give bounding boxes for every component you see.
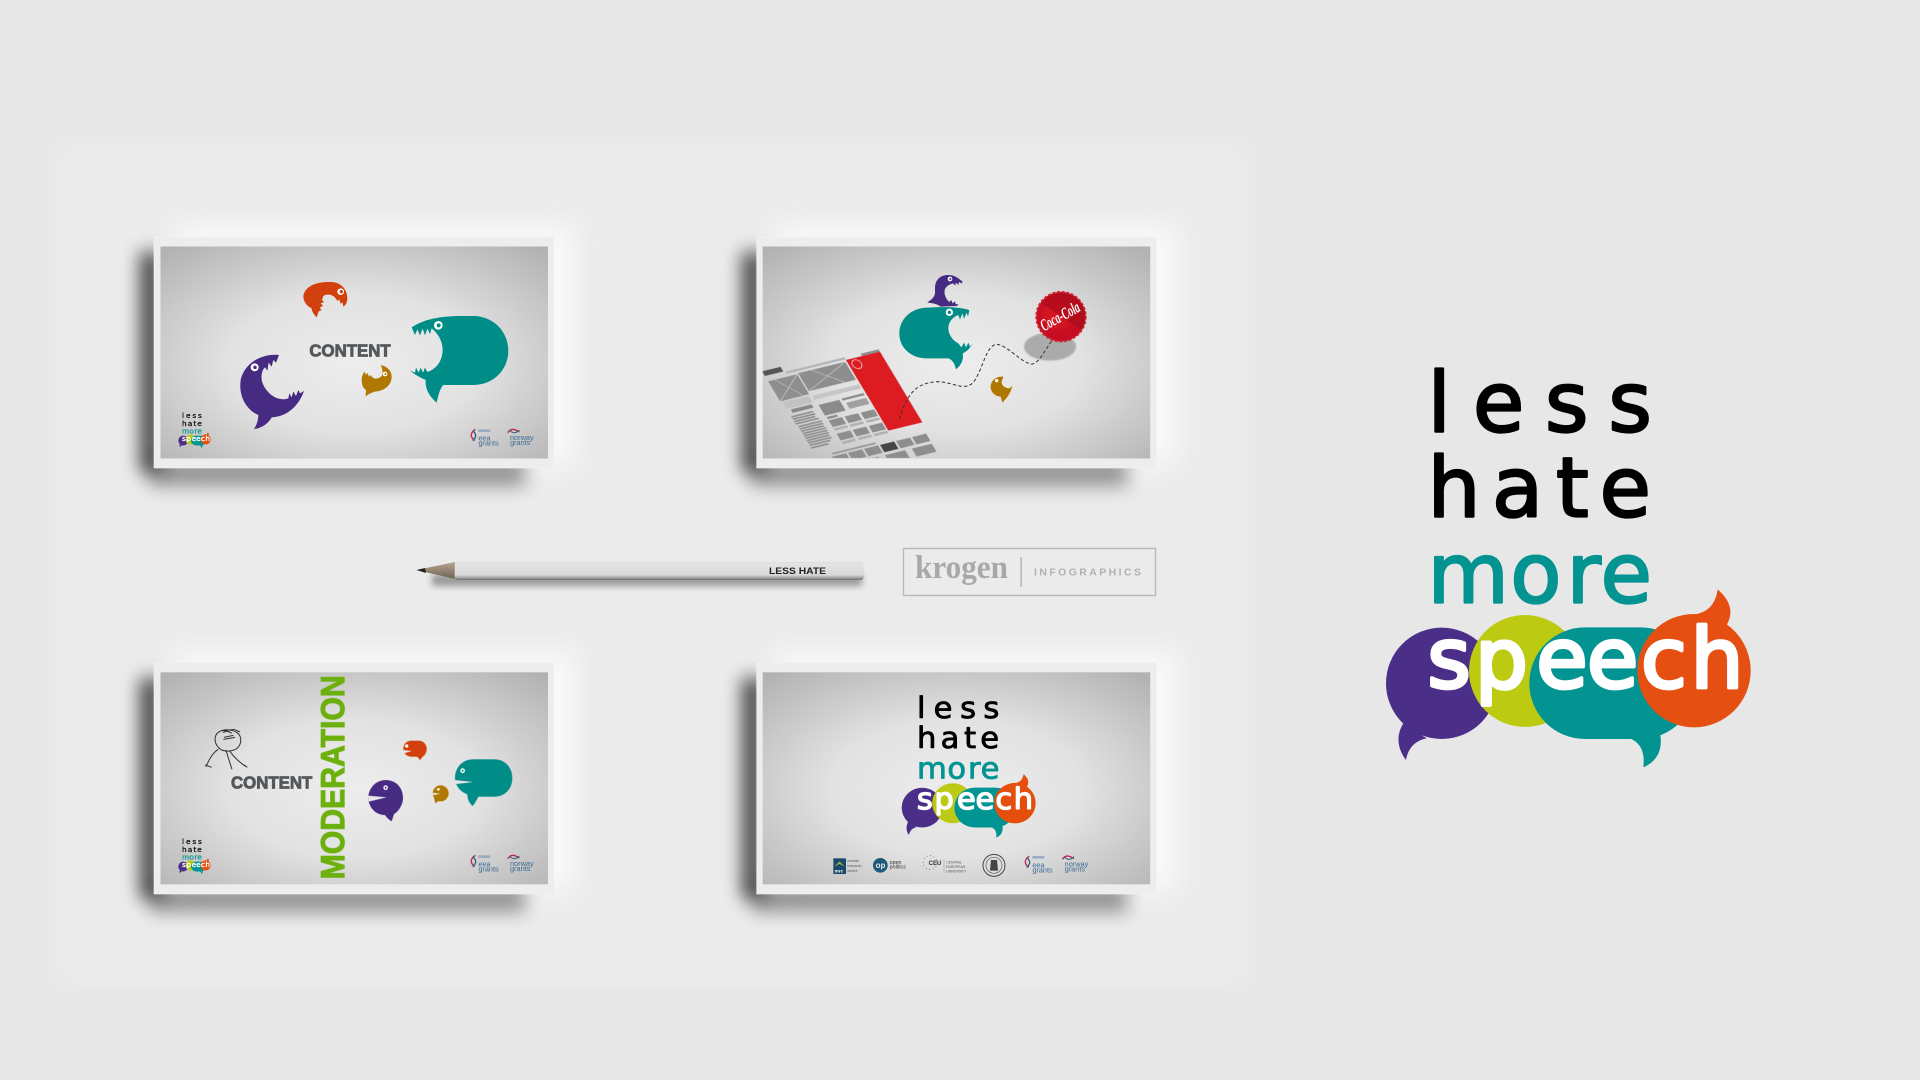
university seal <box>983 854 1005 876</box>
krogen infographics logo: INFOGRAPHICS <box>1034 566 1141 578</box>
icon: teal bubble <box>455 759 512 806</box>
small logo: less <box>182 411 202 420</box>
eea grants logo: grants <box>1032 865 1053 874</box>
eea grants logo: eea <box>478 860 491 869</box>
median research centre logo <box>833 858 862 874</box>
small logo: speech <box>182 860 210 869</box>
speech bubbles <box>1386 589 1751 767</box>
icon: purple bubble <box>368 780 403 821</box>
panel: content moderation <box>140 651 575 912</box>
median research centre logo: research <box>847 864 862 868</box>
eea grants logo: grants <box>478 439 499 448</box>
eea grants logo: grants <box>478 865 499 874</box>
open politics logo <box>873 858 906 873</box>
wordmark: more <box>1428 525 1652 622</box>
dashed path <box>899 340 1052 419</box>
icon: Coca-Cola bottle cap: Coca-Cola <box>1037 298 1083 335</box>
logo: less hate more speech <box>902 691 1036 838</box>
logo: less hate more speech: speech <box>917 782 1033 817</box>
icon: orange monster <box>303 282 347 317</box>
backdrop panel <box>55 142 1250 987</box>
central european university logo: EUROPEAN <box>946 865 966 869</box>
icon: gold monster <box>991 377 1012 403</box>
pencil label: LESS HATE <box>769 566 826 577</box>
krogen infographics logo <box>904 548 1156 596</box>
icon: orange bubble <box>403 741 427 760</box>
small logo: less <box>182 837 202 846</box>
wordmark: less <box>1428 355 1652 452</box>
eea grants logo <box>1025 856 1053 874</box>
small logo: more <box>182 852 202 861</box>
eea grants logo <box>471 429 499 448</box>
wireframe web page <box>762 349 937 458</box>
norway grants logo: norway <box>510 859 534 868</box>
small logo <box>178 837 211 874</box>
small logo: hate <box>182 419 202 428</box>
norway grants logo <box>508 855 534 873</box>
icon: teal monster <box>410 316 508 403</box>
logo: less hate more speech: less <box>917 691 999 726</box>
content label: CONTENT <box>309 341 391 361</box>
norway grants logo: grants <box>1065 865 1085 874</box>
icon: Coca-Cola bottle cap <box>1036 292 1086 341</box>
logo: less hate more speech: more <box>917 752 999 787</box>
open politics logo: open <box>890 860 902 866</box>
norway grants logo <box>508 429 534 447</box>
icon: purple monster <box>240 355 304 429</box>
icon: gold bubble <box>433 785 449 803</box>
wordmark: speech <box>1427 610 1743 707</box>
content label: CONTENT <box>231 773 313 793</box>
open politics logo: politics <box>890 865 906 871</box>
wordmark: hate <box>1428 440 1651 537</box>
icon: bottle cap shadow <box>1024 333 1076 361</box>
small logo: more <box>182 426 202 435</box>
icon: teal monster <box>899 307 973 369</box>
panel: logo and partners <box>742 651 1177 912</box>
eea grants logo: eea <box>478 434 491 443</box>
icon: gold monster <box>362 365 392 397</box>
eea grants logo: eea <box>1032 860 1045 869</box>
norway grants logo: grants <box>510 438 531 447</box>
central european university logo: CENTRAL <box>946 860 962 864</box>
small logo <box>178 411 211 448</box>
pencil <box>416 562 864 586</box>
small logo: speech <box>182 434 210 443</box>
norway grants logo <box>1062 856 1089 874</box>
median research centre logo: centre <box>847 869 858 873</box>
open politics logo: op <box>876 861 886 870</box>
moderation vertical label: MODERATION <box>314 675 351 879</box>
icon: purple monster <box>927 275 963 307</box>
panel: content with monster speech bubbles <box>140 225 575 486</box>
norway grants logo: grants <box>510 864 531 873</box>
krogen infographics logo: krogen <box>915 550 1008 586</box>
median research centre logo: median <box>847 859 859 863</box>
logo: less hate more speech: hate <box>917 722 999 756</box>
panel: website and Coca-Cola ad <box>742 225 1177 486</box>
central european university logo: UNIVERSITY <box>946 870 967 874</box>
norway grants logo: norway <box>510 433 534 442</box>
norway grants logo: norway <box>1065 860 1089 869</box>
wordmark <box>1427 355 1743 707</box>
eea grants logo <box>471 855 499 874</box>
meme face sketch <box>205 729 247 769</box>
central european university logo <box>923 856 967 874</box>
central european university logo: CEU <box>929 861 941 867</box>
main logo: less hate more speech <box>1386 355 1751 767</box>
median research centre logo: mrc <box>835 869 844 874</box>
small logo: hate <box>182 845 202 854</box>
